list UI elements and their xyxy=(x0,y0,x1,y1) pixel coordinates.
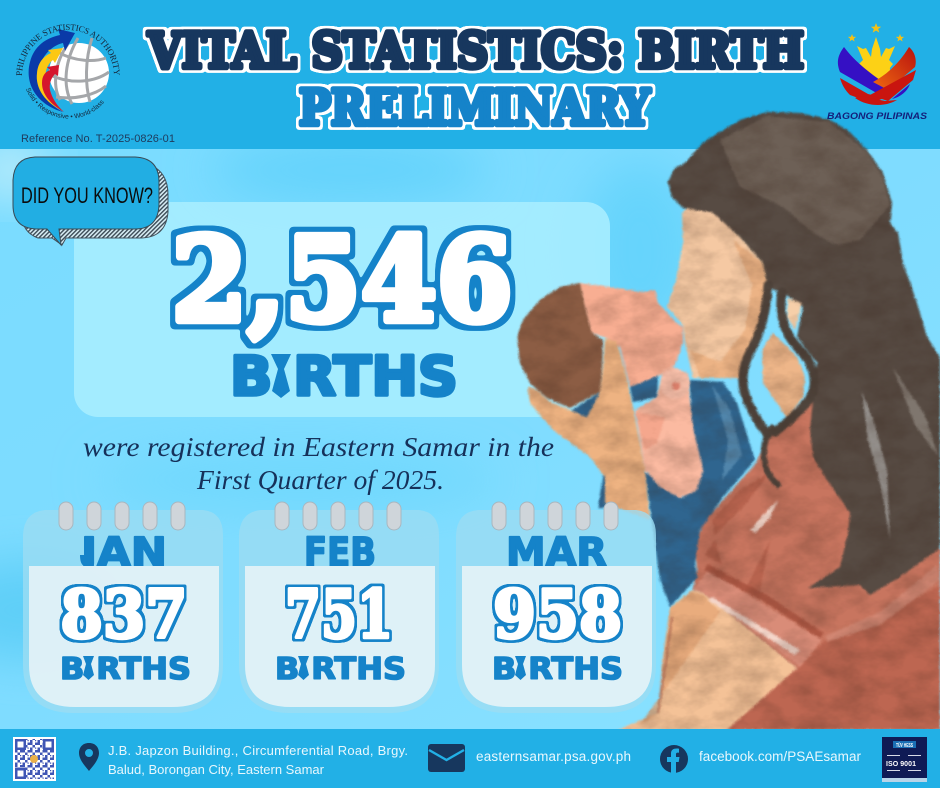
baby's body xyxy=(635,367,703,498)
title line 2: PRELIMINARY xyxy=(299,78,651,136)
footer band xyxy=(0,729,940,788)
month: JAN xyxy=(78,530,167,576)
count: 958 xyxy=(493,576,622,654)
baby's hair xyxy=(517,283,603,408)
chest shading xyxy=(640,592,720,725)
globe xyxy=(49,38,109,104)
neck xyxy=(762,333,805,418)
calendar: March xyxy=(456,502,656,713)
total births xyxy=(172,212,512,408)
hair highlights xyxy=(862,392,890,540)
icon: facebook xyxy=(660,745,688,773)
sun xyxy=(857,37,895,86)
dress light fold band xyxy=(825,565,940,642)
cloth light fold xyxy=(712,385,742,480)
ISO badge: TÜV HESS xyxy=(896,742,913,749)
calendar: January xyxy=(23,502,223,713)
mother's face xyxy=(667,208,768,378)
address line 1: J.B. Japzon Building., Circumferential Road, Brgy. xyxy=(108,743,408,758)
month: FEB xyxy=(304,530,376,576)
mother's hand xyxy=(528,338,650,520)
ear gap skin xyxy=(787,298,802,330)
total number: 2,546 xyxy=(172,212,512,348)
ISO badge xyxy=(882,737,927,782)
blue sliver xyxy=(598,475,606,508)
line 1: were registered in Eastern Samar in the xyxy=(83,431,554,462)
ring text: PHILIPPINE STATISTICS AUTHORITY xyxy=(16,24,120,76)
calendar: February xyxy=(239,502,439,713)
description xyxy=(83,431,554,495)
icon: location pin xyxy=(79,743,99,771)
hatched shadow xyxy=(22,165,168,245)
website: easternsamar.psa.gov.ph xyxy=(476,749,631,764)
line 2: First Quarter of 2025. xyxy=(196,464,444,495)
PSA logo xyxy=(16,24,120,119)
QR code xyxy=(13,737,56,781)
icon: envelope xyxy=(428,744,465,772)
hair tail strand xyxy=(764,428,778,485)
address xyxy=(108,743,408,777)
mother's hair xyxy=(668,112,940,595)
births label: BIRTHS xyxy=(230,345,458,408)
dress highlights xyxy=(708,500,800,655)
bubble text: DID YOU KNOW? xyxy=(21,183,153,208)
icon: necktie letter xyxy=(271,354,291,398)
front hair strands xyxy=(743,285,814,435)
Bagong Pilipinas logo xyxy=(827,23,928,121)
motto: Solid • Responsive • World-class xyxy=(26,88,104,119)
emblem bands xyxy=(838,47,889,95)
stars xyxy=(848,23,904,41)
month: MAR xyxy=(506,530,607,576)
dress shadows xyxy=(706,474,768,590)
J hook xyxy=(80,555,92,566)
count: 837 xyxy=(60,576,188,654)
stat panel xyxy=(74,202,610,417)
arrows xyxy=(29,29,75,112)
bubble xyxy=(13,157,159,245)
count: 751 xyxy=(285,576,393,654)
dress xyxy=(693,398,940,730)
facebook handle: facebook.com/PSAEsamar xyxy=(699,749,862,764)
births: BIRTHS xyxy=(275,652,406,687)
baby's blue cloth xyxy=(645,380,755,607)
baby's fist xyxy=(660,369,690,399)
hair bun xyxy=(720,116,890,245)
did you know bubble xyxy=(13,157,168,245)
reference number: Reference No. T-2025-0826-01 xyxy=(21,133,175,145)
illustration: mother and baby xyxy=(517,112,940,730)
dress lower fold xyxy=(727,585,940,730)
face shading xyxy=(690,240,768,378)
births: BIRTHS xyxy=(492,652,623,687)
dress dark band xyxy=(706,567,822,636)
title xyxy=(147,22,804,136)
baby's shoulder shade xyxy=(635,412,665,450)
ISO badge: ISO 9001 xyxy=(886,761,916,768)
chest crease xyxy=(658,617,672,713)
mother's chest and arm xyxy=(617,590,797,730)
baby collar xyxy=(569,376,658,418)
name: BAGONG PILIPINAS xyxy=(827,110,928,121)
address line 2: Balud, Borongan City, Eastern Samar xyxy=(108,762,325,777)
header band xyxy=(0,0,940,149)
births: BIRTHS xyxy=(60,652,191,687)
baby's face xyxy=(580,283,683,387)
title line 1: VITAL STATISTICS: BIRTH xyxy=(147,22,804,80)
fist detail xyxy=(672,382,680,390)
dress collar strip xyxy=(693,570,822,667)
sky background xyxy=(0,140,940,730)
